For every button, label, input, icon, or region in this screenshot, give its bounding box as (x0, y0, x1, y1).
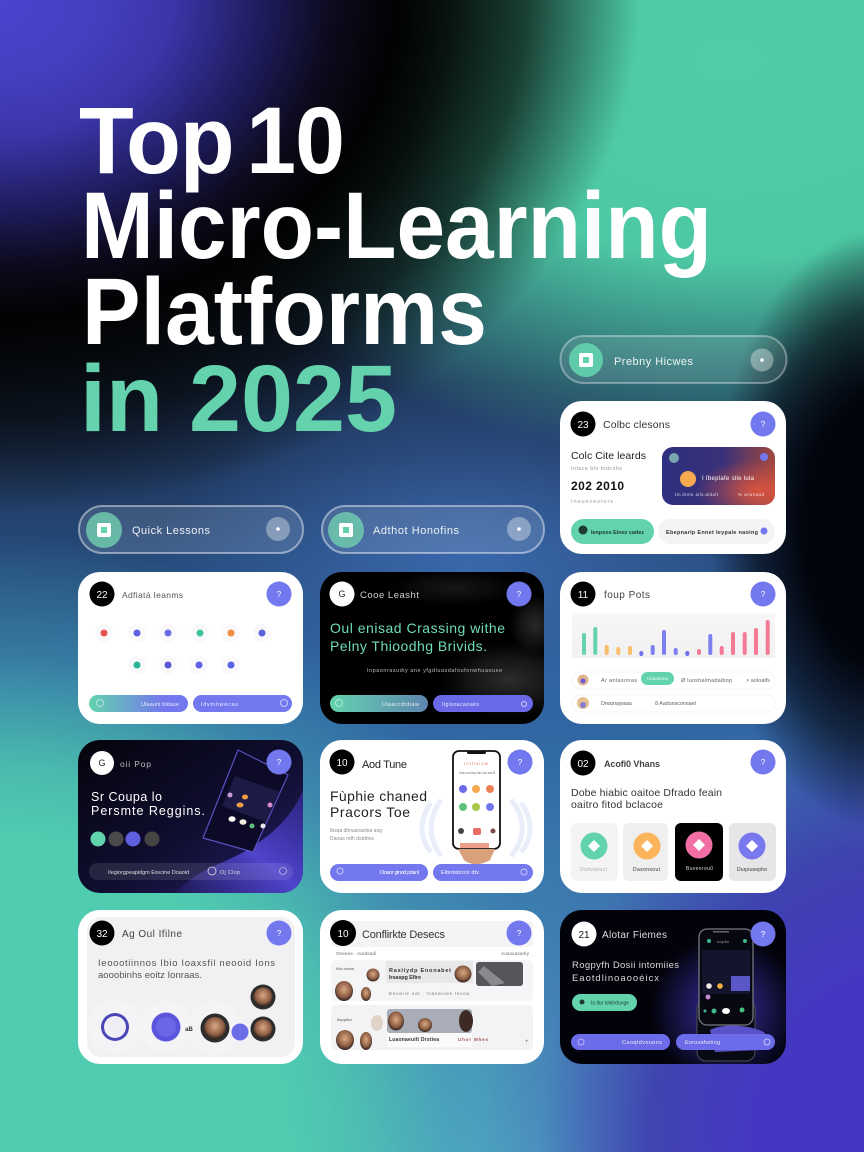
buttons (89, 695, 292, 712)
phone: Ifaundspiacinloalt (459, 771, 496, 775)
card stats text: Inouecestors (571, 499, 613, 505)
row one: > aoloalfs (746, 678, 770, 684)
buttons: Ooaor ginod pdanl (380, 870, 419, 876)
pill icon (569, 343, 603, 377)
green button (571, 519, 654, 544)
avatar row (101, 984, 276, 1042)
phone (453, 751, 500, 849)
title: Top 10 (79, 88, 344, 194)
card number (570, 582, 596, 606)
card name: Conflirkte Desecs (362, 929, 446, 941)
pill label: Adthot Honofins (373, 525, 460, 537)
bottom bar: Oj Clop (220, 870, 240, 876)
card: oii Pop (78, 740, 303, 893)
phone: Iuqutio (717, 939, 730, 944)
card action (266, 582, 292, 606)
pill: Prebny Hicwes (560, 336, 786, 383)
tile orange: Dasonsout (633, 867, 661, 873)
hand (458, 849, 495, 864)
card number: G (98, 758, 106, 768)
row two (331, 1005, 533, 1050)
promo image (662, 447, 775, 505)
subheader: Aoasuasarky (501, 951, 530, 956)
row two (572, 695, 775, 712)
buttons: Ulaaunt bldase (141, 702, 179, 708)
card headline (571, 787, 722, 811)
card name: Colbc clesons (603, 419, 670, 431)
tile pink: Buvenrou0 (686, 866, 713, 872)
promo image: I Ibeplafe slle lula (702, 476, 755, 482)
card number (570, 750, 596, 776)
card headline: Pelny Thioodhg Brivids. (330, 638, 487, 654)
row two: Uhor Mhes (458, 1037, 488, 1042)
pill action (750, 348, 774, 372)
card headline (91, 790, 205, 818)
card number (570, 412, 596, 436)
card name: Cooe Leasht (360, 590, 419, 601)
card action (750, 582, 776, 606)
card action (750, 750, 776, 774)
avatar row: aB (185, 1027, 194, 1033)
pill label: Prebny Hicwes (614, 356, 694, 368)
card action (750, 412, 776, 436)
card number: 23 (577, 420, 589, 431)
pill action (507, 517, 531, 541)
buttons: Eoruvaheting (685, 1040, 720, 1046)
purple glow (654, 944, 786, 1064)
promo image: % arwnaad (738, 492, 764, 497)
card number: 21 (578, 930, 590, 941)
card: Aod Tune (320, 740, 544, 893)
pill label: Quick Lessons (132, 525, 210, 537)
row two: + (525, 1039, 529, 1045)
buttons: Eibntsbroiz dtx (441, 870, 479, 876)
tile purple: Duqousepho (737, 867, 767, 873)
card name: Ag Oul Ifilne (122, 929, 182, 940)
halo circles (88, 1000, 242, 1055)
row one: Ulaalanos (647, 676, 669, 681)
card text: aooobinhs eoitz Ionraas. (98, 970, 202, 981)
title: Micro-Learning (81, 173, 712, 279)
card action: ? (277, 590, 282, 599)
card: Adfiats Ieanms (78, 572, 303, 724)
card action: ? (277, 758, 282, 767)
card number (90, 920, 114, 946)
card action: ? (517, 929, 522, 938)
tilted phone (203, 750, 288, 852)
phone (699, 929, 753, 1025)
row one: Ø luoshalmadaibop (681, 678, 732, 684)
row one (572, 672, 775, 689)
card: Conflirkte Desecs (320, 910, 544, 1064)
buttons (330, 864, 533, 881)
bottom bar (89, 863, 293, 880)
promo image: tin.linne ails.aldalt (675, 492, 719, 497)
buttons (330, 695, 533, 712)
card action (506, 582, 532, 606)
green button: Ienpsos Einez cadez (591, 530, 644, 536)
row one: Ar anlasonas (601, 678, 637, 684)
card name: Acofi0 Vhans (604, 759, 660, 769)
card number (330, 582, 354, 606)
card action (506, 920, 532, 946)
card action: ? (761, 758, 766, 767)
card: Acoli Vhans (560, 740, 786, 893)
lower phone (697, 1000, 755, 1061)
bottom bar: Ilegiorgpeapidgm Esvcine Doaoid (108, 870, 189, 876)
buttons: Idvmnwecas (201, 702, 238, 708)
card action: ? (761, 420, 766, 429)
card number: 10 (337, 929, 349, 940)
card headline: oaitro fitod bclacoe (571, 799, 663, 811)
card text (98, 958, 275, 981)
row one: Kiin vinow (336, 966, 354, 971)
pill icon (328, 512, 364, 548)
hand (710, 1026, 765, 1052)
card headline (330, 788, 427, 820)
card number: G (338, 589, 346, 599)
green button (572, 994, 637, 1011)
card action: ? (277, 929, 282, 938)
card headline: Rogpyfh Dosii intomiies (572, 960, 679, 971)
card stats text (571, 450, 646, 505)
card action (508, 750, 532, 774)
pill action (266, 517, 290, 541)
card number (330, 920, 356, 946)
card action (266, 750, 292, 774)
row two: Luaonaeuilt Drstiea (389, 1037, 439, 1043)
card action: ? (761, 590, 766, 599)
card number (330, 750, 354, 774)
buttons (571, 1034, 775, 1050)
card name: Aod Tune (362, 759, 407, 771)
infographic canvas (78, 106, 788, 1064)
row two: 8 Aadunsconsaet (655, 701, 696, 707)
card number (90, 751, 114, 775)
subheader (336, 951, 530, 956)
title: in 2025 (80, 346, 397, 452)
card headline (330, 620, 505, 654)
card action (266, 920, 292, 946)
card number: 11 (578, 590, 589, 601)
card headline: Fùphie chaned (330, 788, 427, 804)
pill icon (86, 512, 122, 548)
card headline: Dobe hiabic oaitoe Dfrado feain (571, 787, 722, 799)
card stats text: 202 2010 (571, 479, 624, 493)
signal waves (422, 800, 530, 856)
card number: 22 (96, 590, 108, 601)
card caption: Ibsqa dhnasoaoloa aog (330, 828, 382, 834)
card headline: Sr Coupa lo (91, 790, 162, 804)
card headline: Oul enisad Crassing withe (330, 620, 505, 636)
purple ribbon (175, 790, 303, 893)
pill: Quick Lessons (79, 506, 303, 553)
card name: foup Pots (604, 590, 650, 601)
bar chart (572, 613, 775, 658)
buttons: Caoqtdvouons (622, 1040, 662, 1046)
card caption: Daoas ndh dstdtios (330, 836, 374, 842)
card stats text: Inlace blo bidcshs (571, 466, 622, 472)
tile pink (675, 823, 723, 881)
card action: ? (517, 590, 522, 599)
card number: 02 (577, 759, 589, 770)
card number (572, 922, 596, 946)
card caption: Inpaonrasudiy ane yfgdiuasdafoufonwhuaouse (367, 668, 502, 674)
title (79, 88, 712, 452)
card name: oii Pop (120, 759, 151, 769)
platform icon grid (95, 624, 271, 674)
card action (750, 922, 776, 946)
gray button: Ebepnarlp Ennet Ieypale naoing (666, 530, 758, 536)
row two: Ilnpylsto (337, 1017, 352, 1022)
green button: Ia tlur lohitrdunge (591, 1000, 629, 1006)
category chips (90, 832, 160, 846)
phone: Iorhaiow (464, 761, 489, 766)
card number (90, 582, 114, 606)
card number: 32 (96, 929, 108, 940)
smoke image (412, 576, 544, 708)
card: Cooe Leasht (320, 572, 544, 724)
subheader: Oneane . Aardsadi (336, 951, 376, 956)
card: Colc clesons (560, 401, 786, 554)
card headline (572, 960, 679, 984)
card number: 10 (336, 758, 348, 769)
gray button (658, 519, 775, 544)
tile green: Dadvanuct (580, 867, 608, 873)
card headline: Pracors Toe (330, 804, 410, 820)
card stats text: Colc Cite leards (571, 450, 646, 462)
row one: Enoarie oat . Inanaloes Inooa (389, 991, 469, 996)
row two: Dnounaysaas (601, 701, 632, 707)
row one (331, 960, 533, 1001)
card action: ? (761, 930, 766, 939)
card headline: Persmte Reggins. (91, 804, 205, 818)
card name: Adfiatá Ieanms (122, 590, 183, 600)
tile purple (729, 823, 776, 881)
card: Ag Oul Ifilne (78, 910, 303, 1064)
pill: Adthot Honofins (322, 506, 544, 553)
card headline: Eaotdlinoaooéicx (572, 973, 659, 984)
card: Alotar Fiemes (560, 910, 786, 1064)
row one: Rasiiydp Enonabet (389, 968, 451, 974)
buttons: Ulaacrdtdiaw (382, 702, 419, 708)
card action: ? (518, 758, 523, 767)
title: Platforms (82, 259, 487, 365)
card name: Alotar Fiemes (602, 930, 667, 941)
row one: Irsaspg Efire (389, 975, 421, 981)
tile orange (623, 823, 668, 881)
card caption (330, 828, 382, 842)
card text: Ieoootiinnos Ibio Ioaxsfil neooid Ions (98, 958, 275, 969)
card: foup Pots (560, 572, 786, 724)
buttons: Ilgisoacaoaés (442, 702, 479, 708)
tile green (571, 823, 618, 881)
